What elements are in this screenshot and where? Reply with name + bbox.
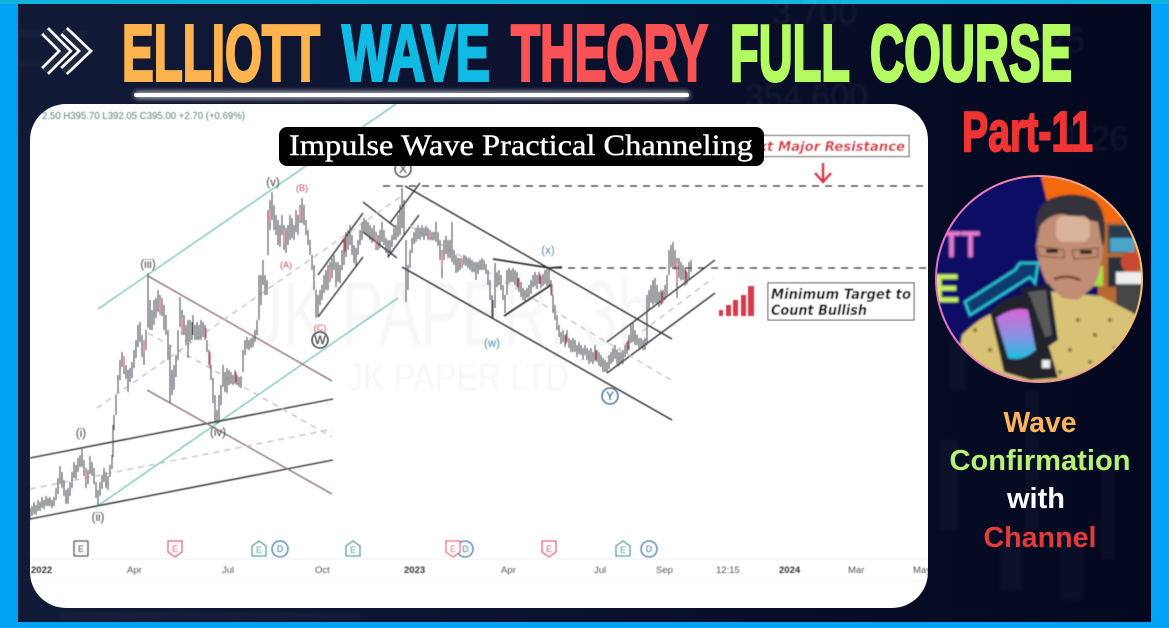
label: minimum target: Minimum Target to [771,287,911,303]
wave labels: (B) [296,183,308,193]
heading: impulse wave practical channeling: Impulse Wave Practical Channeling [289,129,753,162]
event markers: E [78,544,84,554]
side text: wave confirmation with channel: Channel [984,522,1096,554]
wave labels: (iii) [140,259,156,271]
side text: wave confirmation with channel: with [1006,483,1065,515]
label: next major resistance [738,136,909,156]
wave circles: W [314,333,326,347]
event markers: E [350,545,356,555]
wave labels: (iv) [210,427,226,439]
presenter portrait: E [933,267,960,311]
label: minimum target: Count Bullish [771,303,867,319]
event markers: E [620,545,626,555]
time axis: Oct [315,565,330,576]
time axis: 12:15 [716,565,740,576]
title: Elliott Wave Theory Full Course: FULL [730,8,850,98]
wave labels: (A) [280,260,292,270]
wave labels [76,177,555,524]
wave circles: X [399,162,407,176]
event markers: E [546,544,552,554]
time axis: 2023 [404,565,425,576]
event markers: D [462,544,469,554]
title: Elliott Wave Theory Full Course [122,8,1072,98]
time axis: 2024 [779,565,801,576]
presenter portrait [935,175,1143,383]
part number: Part-11 [962,100,1093,164]
wave labels: (w) [484,338,500,350]
wave labels: (C) [314,323,326,333]
event markers: E [450,544,456,554]
time axis: Sep [656,565,673,576]
side text: wave confirmation with channel: Wave [1004,407,1076,439]
chart watermark: JK PAPER LTD [347,357,569,399]
icon: red down arrow [815,163,831,182]
wave labels: (i) [76,428,86,440]
wave circles [312,161,618,404]
chart watermark [257,282,646,345]
background: dark trading backdrop with blue border: 1.26 [1062,120,1128,158]
background: dark trading backdrop with blue border: 354,600 [745,78,868,116]
title: Elliott Wave Theory Full Course: ELLIOTT [122,8,320,98]
icon: red signal bars [719,286,754,316]
title underline glow [134,91,690,99]
time axis [30,559,931,581]
chart watermark: JK PAPER, 3h [252,263,652,365]
label: next major resistance: Next Major Resistance [738,140,905,155]
time axis: 2022 [31,565,52,576]
event markers: D [646,544,653,554]
presenter portrait: TT [942,224,980,265]
wave labels: (v) [266,177,280,189]
channel lines [30,104,928,519]
time axis: May [913,565,931,576]
label: minimum target [768,283,914,320]
time axis: Jul [594,565,606,576]
wave labels: (x) [541,245,555,257]
side text: wave confirmation with channel: Confirmation [950,445,1130,477]
side text: wave confirmation with channel [950,407,1130,554]
price candles [30,188,691,520]
time axis: Apr [501,565,516,576]
icon: double chevron arrows [45,31,85,71]
background: dark trading backdrop with blue border: 325 [1028,22,1085,60]
wave circles: Y [606,389,614,403]
title: Elliott Wave Theory Full Course: WAVE [342,8,490,98]
time axis: Mar [848,565,864,576]
wave labels: (ii) [92,512,105,524]
event markers: E [172,544,178,554]
event markers: D [277,544,284,554]
time axis: Jul [222,565,234,576]
time axis: Apr [127,565,142,576]
chart readout: 2.50 H395.70 L392.05 C395.00 +2.70 (+0.69%) [42,110,245,122]
panel: chart card [30,104,931,608]
title: Elliott Wave Theory Full Course: THEORY [511,8,708,98]
event markers [74,541,657,557]
event markers: E [256,545,262,555]
